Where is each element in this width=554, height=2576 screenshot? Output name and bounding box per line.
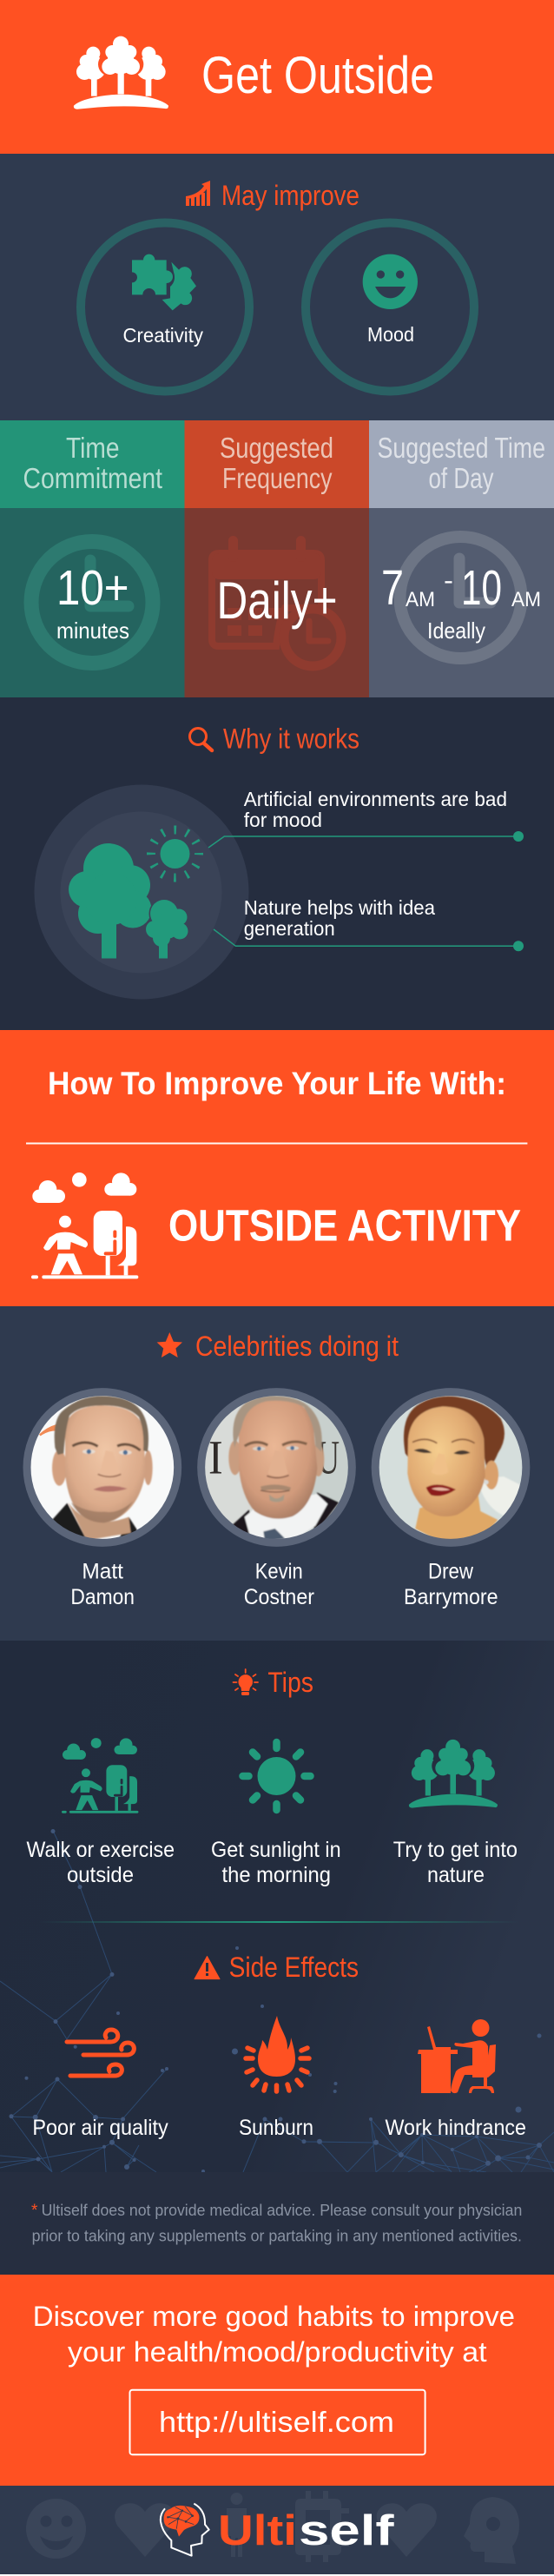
callout: nature helps bbox=[214, 896, 524, 951]
icon: flame with rays bbox=[246, 2016, 309, 2091]
icon: faint clock bbox=[399, 537, 521, 658]
heading: how to improve: How To Improve Your Life With: bbox=[48, 1066, 506, 1101]
heading: tips: Tips bbox=[267, 1667, 313, 1698]
link button bbox=[130, 2390, 425, 2454]
panel: time commitment: minutes bbox=[56, 618, 129, 644]
panel: call to action: your health/mood/productivity at bbox=[68, 2336, 487, 2368]
names: celebrities: Kevin bbox=[255, 1560, 303, 1584]
panel: suggested time of day: - bbox=[444, 566, 453, 595]
icon: faint calendar with clock bbox=[212, 536, 341, 666]
panel: disclaimer: prior to taking any supplements or partaking in any mentioned activities. bbox=[32, 2227, 522, 2245]
icon: sun bbox=[243, 1742, 311, 1810]
callout: nature helps: Nature helps with idea bbox=[244, 896, 435, 919]
panel: suggested frequency: Daily+ bbox=[217, 571, 337, 630]
callout: artificial environments bbox=[208, 788, 524, 848]
link button: http://ultiself.com bbox=[159, 2406, 394, 2438]
portrait: Drew Barrymore bbox=[373, 1390, 527, 1546]
tip: get into nature: nature bbox=[427, 1863, 485, 1887]
heading: may improve: May improve bbox=[221, 180, 359, 211]
panel: disclaimer bbox=[0, 2172, 554, 2275]
names: celebrities: Barrymore bbox=[404, 1585, 498, 1609]
icon: small tree bbox=[146, 900, 188, 959]
background network pattern bbox=[0, 1829, 554, 2173]
callout: artificial environments: for mood bbox=[244, 809, 322, 831]
tip: walk or exercise outside: Walk or exercise bbox=[26, 1838, 175, 1862]
portrait: Kevin Costner bbox=[200, 1390, 353, 1546]
circle: creativity bbox=[81, 222, 249, 391]
heading: celebrities: Celebrities doing it bbox=[195, 1331, 399, 1362]
circle: mood: Mood bbox=[367, 323, 414, 346]
logo: ultiself: Ulti bbox=[218, 2507, 297, 2554]
icon: faint clock bbox=[31, 542, 153, 664]
icon: trees bbox=[409, 1740, 498, 1808]
icon: sun bbox=[151, 830, 199, 877]
circle: creativity: Creativity bbox=[123, 324, 203, 347]
panel: disclaimer: * bbox=[31, 2202, 38, 2220]
heading: why it works: Why it works bbox=[223, 723, 359, 754]
icon: large tree bbox=[69, 843, 151, 959]
panel: suggested time of day: AM bbox=[511, 588, 541, 611]
panel: call to action: Discover more good habits to improve bbox=[33, 2301, 515, 2332]
panel: why it works bbox=[0, 697, 554, 1030]
panel: footer bbox=[0, 2486, 554, 2576]
panel: tips and side effects bbox=[0, 1641, 554, 2173]
panel: suggested frequency: Suggested bbox=[220, 432, 333, 464]
tip: walk or exercise outside: outside bbox=[67, 1863, 134, 1887]
panel: celebrities doing it bbox=[0, 1306, 554, 1641]
panel: time commitment: Time bbox=[66, 432, 120, 464]
icon: person walking bbox=[62, 1738, 138, 1813]
icon: puzzle pieces bbox=[132, 254, 196, 310]
names: celebrities: Costner bbox=[244, 1585, 314, 1609]
heading: tips bbox=[233, 1667, 313, 1698]
title: Get Outside bbox=[201, 46, 434, 104]
panel: time commitment: 10+ bbox=[56, 560, 129, 616]
side effect: poor air quality bbox=[32, 2030, 168, 2140]
heading: side effects: Side Effects bbox=[229, 1952, 359, 1983]
icon: wind bbox=[67, 2030, 134, 2076]
panel: call to action bbox=[0, 2275, 554, 2486]
panel: suggested frequency bbox=[184, 420, 369, 697]
panel: time commitment: Commitment bbox=[23, 462, 162, 494]
panel: disclaimer: Ultiself does not provide medical advice. Please consult your physician bbox=[42, 2201, 522, 2219]
portrait: Matt Damon bbox=[26, 1390, 180, 1546]
panel: suggested time of day: Ideally bbox=[427, 618, 485, 644]
icon: person walking outside bbox=[31, 1172, 138, 1278]
faint footer icons bbox=[26, 2491, 519, 2564]
tip: get sunlight: Get sunlight in bbox=[211, 1838, 341, 1862]
tip: get sunlight bbox=[211, 1742, 341, 1887]
tip: get sunlight: the morning bbox=[222, 1863, 331, 1887]
callout: artificial environments: Artificial environments are bad bbox=[244, 788, 507, 810]
tip: get into nature: Try to get into bbox=[393, 1838, 518, 1862]
panel: may improve bbox=[0, 154, 554, 420]
icon: person at desk bbox=[418, 2019, 496, 2093]
panel: how to improve bbox=[0, 1030, 554, 1306]
icon: brain in head bbox=[161, 2504, 209, 2556]
side effect: poor air quality: Poor air quality bbox=[32, 2116, 168, 2140]
panel: suggested time of day: 7 bbox=[381, 560, 404, 616]
portrait: Kevin Costner: I bbox=[208, 1431, 223, 1484]
icon: three trees bbox=[74, 36, 168, 109]
side effect: sunburn bbox=[239, 2016, 313, 2140]
logo: ultiself bbox=[161, 2504, 394, 2556]
panel: suggested time of day: AM bbox=[406, 588, 435, 611]
portrait: Kevin Costner: U bbox=[317, 1431, 340, 1484]
names: celebrities: Drew bbox=[428, 1560, 474, 1584]
side effect: sunburn: Sunburn bbox=[239, 2116, 313, 2140]
panel: suggested time of day: of Day bbox=[429, 462, 494, 494]
panel: suggested time of day: 10 bbox=[461, 560, 502, 616]
tip: get into nature bbox=[393, 1740, 518, 1887]
names: celebrities: Damon bbox=[70, 1585, 135, 1609]
illustration: nature in circles bbox=[35, 785, 248, 999]
names: celebrities bbox=[70, 1560, 498, 1609]
side effect: work hindrance bbox=[386, 2019, 526, 2140]
names: celebrities: Matt bbox=[82, 1560, 123, 1584]
tip: walk or exercise outside bbox=[26, 1738, 175, 1887]
side effect: work hindrance: Work hindrance bbox=[386, 2116, 526, 2140]
panel: suggested frequency: Frequency bbox=[222, 462, 333, 494]
panel: suggested time of day bbox=[369, 420, 554, 697]
panel: title banner bbox=[0, 0, 554, 154]
icon: smiling face bbox=[363, 254, 418, 309]
callout: nature helps: generation bbox=[244, 917, 335, 940]
logo: ultiself: self bbox=[299, 2507, 394, 2554]
circle: mood bbox=[306, 222, 474, 391]
panel: time commitment bbox=[0, 420, 184, 697]
